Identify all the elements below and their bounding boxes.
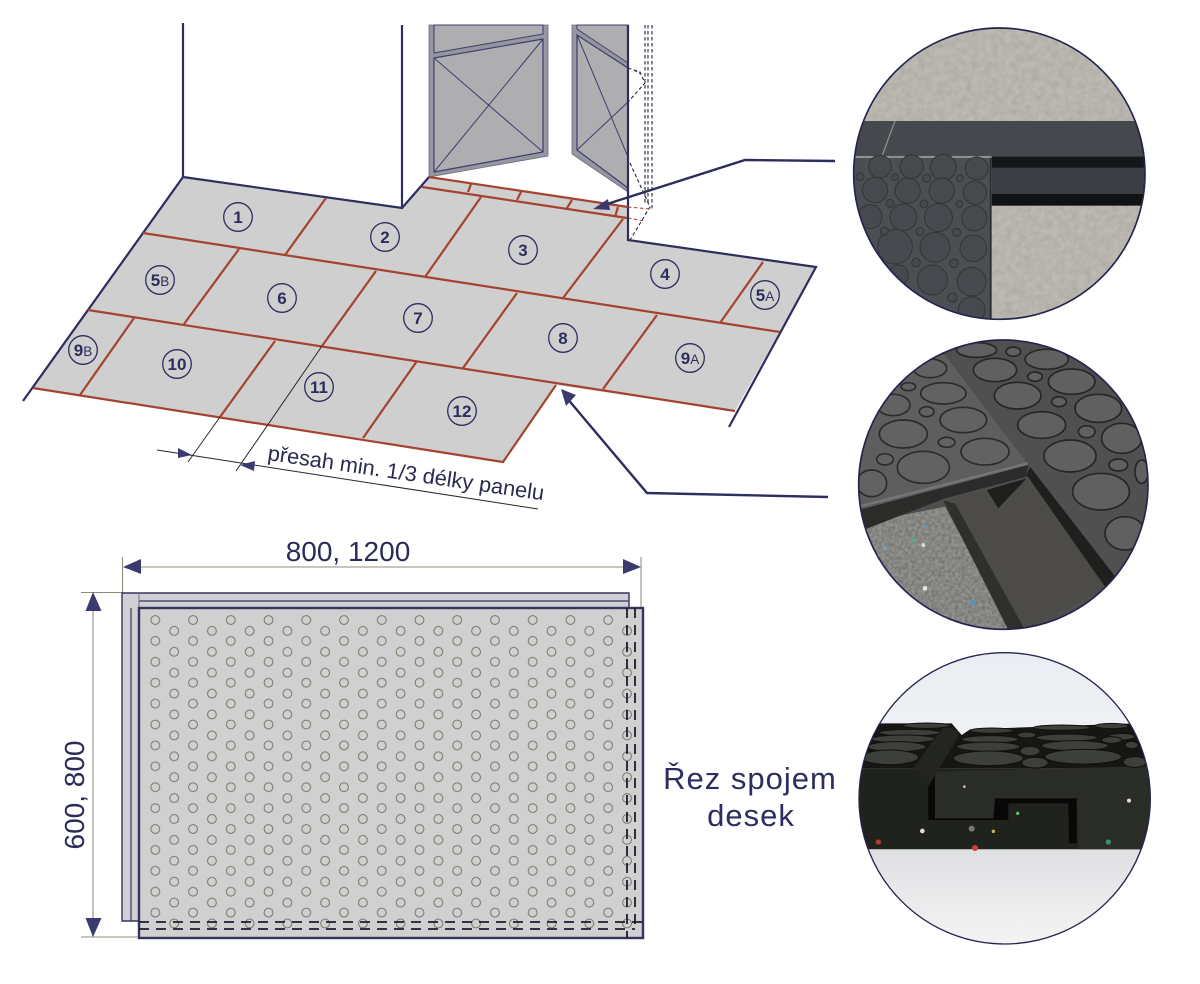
panel number markers: 9A	[681, 349, 699, 368]
panel number markers: 6	[277, 289, 287, 308]
right door leaf	[572, 25, 628, 192]
top surface backing	[855, 723, 1155, 768]
panel number markers: 7	[413, 309, 423, 328]
panel number markers: 2	[380, 228, 390, 247]
arrow: to middle photo	[561, 389, 828, 497]
rubber block	[855, 766, 1155, 849]
panel number markers: 5A	[756, 286, 774, 305]
overlap label: přesah min. 1/3 délky panelu	[266, 441, 546, 505]
height dimension	[59, 592, 138, 937]
overlap dimension lines and arrows	[157, 346, 538, 509]
width dimension: 800, 1200	[286, 536, 410, 567]
panel number markers: 10	[168, 355, 186, 374]
right studded panel	[956, 342, 1147, 586]
caption: joint section	[663, 761, 837, 833]
caption: joint section: desek	[707, 798, 795, 833]
top panel with studs	[139, 608, 643, 938]
photo: top view of panel on threshold strip	[852, 27, 1146, 320]
studded rubber panel	[845, 154, 992, 323]
hidden tongue dashed lines	[139, 608, 643, 938]
panel number markers: 12	[453, 402, 471, 421]
left studded panel	[860, 355, 1028, 529]
connecting strip	[944, 478, 1026, 628]
studs	[862, 723, 1147, 768]
floor surface	[33, 177, 816, 462]
panel number markers	[69, 203, 779, 425]
building walls and floor boundary	[23, 23, 816, 427]
panel: single panel plan drawing	[59, 536, 643, 938]
raised ridge	[913, 728, 959, 787]
height dimension: 600, 800	[59, 740, 90, 850]
panel number markers: 1	[233, 208, 243, 227]
left door leaf	[429, 25, 548, 177]
panel: isometric floor layout diagram	[23, 23, 816, 509]
arrow: to top photo	[593, 160, 835, 210]
underlying panel edge	[122, 593, 629, 921]
photo: panel lifted over connecting strip	[858, 339, 1149, 630]
panel number markers: 9B	[74, 341, 92, 360]
ground	[866, 506, 1008, 628]
photo: section through panel joint	[858, 652, 1151, 945]
threshold strip	[845, 121, 1165, 156]
width dimension	[122, 536, 641, 607]
red panel joints	[33, 177, 780, 462]
panel number markers: 4	[660, 265, 670, 284]
panel number markers: 5B	[151, 271, 169, 290]
joint gap	[928, 772, 1077, 843]
caption: joint section: Řez spojem	[663, 761, 837, 796]
dashed door frame hidden lines	[628, 25, 652, 240]
panel number markers: 8	[558, 329, 568, 348]
panel number markers: 3	[518, 241, 528, 260]
panel number markers: 11	[310, 378, 328, 397]
rubber speckles	[876, 785, 1131, 851]
concrete	[855, 28, 1143, 318]
